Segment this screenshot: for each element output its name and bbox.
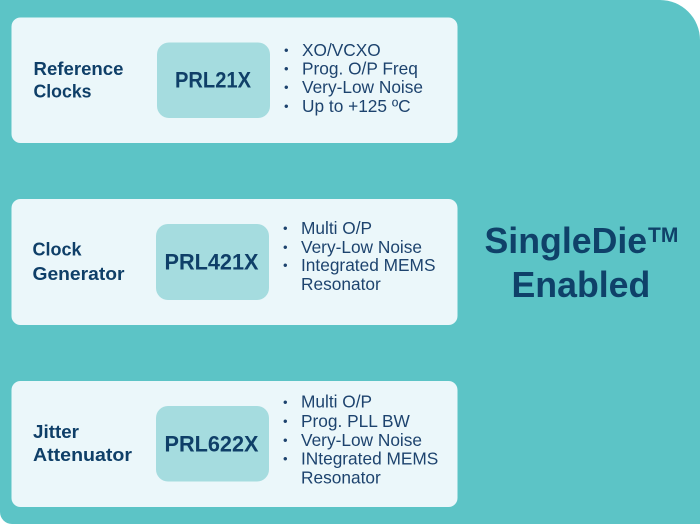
feature list: reference clocks bbox=[284, 40, 423, 116]
callout: SingleDie Enabled: TM bbox=[648, 224, 678, 247]
heading: jitter attenuator: Jitter bbox=[33, 422, 79, 442]
feature list: clock generator: • bbox=[283, 258, 288, 272]
chip: PRL21X bbox=[157, 42, 270, 118]
callout: SingleDie Enabled: SingleDie bbox=[484, 221, 647, 261]
callout: SingleDie Enabled: Enabled bbox=[512, 265, 650, 305]
feature list: reference clocks: Prog. O/P Freq bbox=[302, 58, 418, 78]
chip: PRL622X: PRL622X bbox=[164, 432, 259, 456]
feature list: jitter attenuator: • bbox=[283, 414, 288, 428]
feature list: jitter attenuator: • bbox=[283, 432, 288, 448]
chip: PRL421X bbox=[156, 224, 269, 300]
feature list: jitter attenuator: • bbox=[283, 394, 288, 410]
feature list: reference clocks: Very-Low Noise bbox=[302, 77, 423, 97]
heading: clock generator: Clock bbox=[32, 240, 82, 260]
heading: jitter attenuator: Attenuator bbox=[33, 445, 132, 465]
heading: clock generator: Generator bbox=[32, 264, 124, 284]
feature list: clock generator: • bbox=[283, 220, 288, 236]
heading: reference clocks: Reference bbox=[34, 59, 124, 79]
feature list: jitter attenuator: Prog. PLL BW bbox=[301, 411, 411, 431]
panel: jitter attenuator bbox=[12, 381, 458, 507]
feature list: reference clocks: Up to +125 ºC bbox=[302, 96, 411, 116]
feature list: clock generator: Very-Low Noise bbox=[301, 237, 422, 257]
feature list: clock generator: Integrated MEMS bbox=[301, 255, 435, 275]
feature list: reference clocks: • bbox=[284, 42, 289, 58]
feature list: jitter attenuator: Resonator bbox=[301, 467, 381, 487]
heading: reference clocks bbox=[34, 59, 124, 102]
feature list: reference clocks: XO/VCXO bbox=[302, 40, 381, 60]
heading: jitter attenuator bbox=[33, 422, 132, 465]
feature list: jitter attenuator: INtegrated MEMS bbox=[301, 448, 438, 468]
feature list: clock generator: • bbox=[283, 240, 288, 254]
feature list: clock generator: Multi O/P bbox=[301, 218, 372, 238]
feature list: reference clocks: • bbox=[284, 61, 289, 76]
heading: clock generator bbox=[32, 240, 124, 284]
chip: PRL622X bbox=[156, 406, 269, 482]
feature list: jitter attenuator bbox=[283, 392, 438, 487]
feature list: jitter attenuator: Multi O/P bbox=[301, 392, 372, 412]
feature list: reference clocks: • bbox=[284, 98, 289, 114]
feature list: clock generator bbox=[283, 218, 435, 294]
chip: PRL421X: PRL421X bbox=[164, 249, 259, 274]
heading: reference clocks: Clocks bbox=[34, 82, 92, 102]
panel: reference clocks bbox=[12, 18, 458, 143]
feature list: reference clocks: • bbox=[284, 80, 289, 94]
feature list: clock generator: Resonator bbox=[301, 274, 381, 294]
feature list: jitter attenuator: • bbox=[283, 451, 288, 466]
callout: SingleDie Enabled bbox=[484, 221, 678, 305]
panel: clock generator bbox=[12, 199, 458, 325]
feature list: jitter attenuator: Very-Low Noise bbox=[301, 430, 422, 450]
chip: PRL21X: PRL21X bbox=[175, 67, 251, 92]
